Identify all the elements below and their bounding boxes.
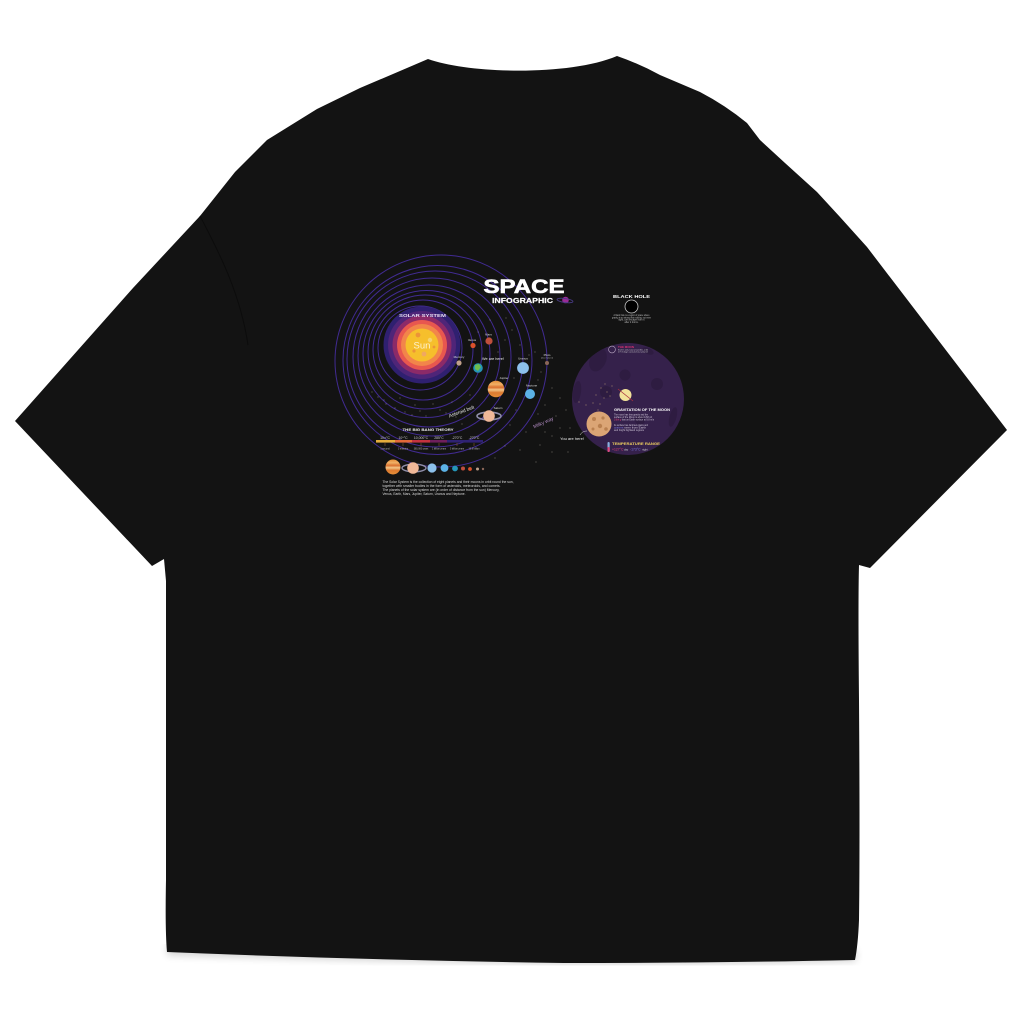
black hole text: light, can escape from it [618,319,645,322]
icon: purple ringed planet [557,297,573,304]
gravitation text [614,414,655,432]
black hole text: after it forms. [624,321,639,324]
stars [372,318,570,462]
panel: black hole [612,294,652,324]
gravitation text: 1/6th g that on Earth surface at 9.8 m/s [614,418,655,422]
temperature range: TEMPERATURE RANGE [612,442,661,446]
moon header text: THE MOON [618,345,634,349]
subtitle: INFOGRAPHIC [492,296,554,305]
moon header text: Earth's only natural satellite, orbit [618,348,648,352]
planets on orbits [454,332,553,422]
asteroid belt label: Asteroid belt [448,404,476,419]
black hole text [612,314,652,324]
mars: Mars [485,332,492,336]
pluto: Pluto [544,353,551,357]
venus: Venus [468,338,477,342]
mercury: Mercury [454,355,465,359]
black hole heading: BLACK HOLE [613,294,651,300]
gravitation heading: GRAVITATION OF THE MOON [614,408,670,412]
moon header text [618,345,649,354]
sun label: Sun [414,340,430,352]
temperature range: +127°C [612,448,624,452]
solar system description: The planets of the solar system are (in order of distance from the sun) Mercury, [382,488,500,492]
you are here label: You are here! [560,436,584,441]
earth [473,363,483,373]
big bang timeline: 285°C [434,436,444,440]
moon header text: 27.3 days around our planet [618,350,649,354]
black hole text: A black hole is a region of space where [614,314,650,317]
big bang timeline: -270°C [469,436,480,440]
solar system orbits [335,255,547,467]
big bang timeline: 10¹²°C [380,436,390,440]
icon: large planet [586,412,612,436]
temperature range: -173°C [630,448,641,452]
big bang timeline: 1 billion years [432,448,447,450]
title: SPACE [484,277,564,298]
big bang timeline: 3 minutes [398,448,409,450]
pluto [541,353,553,365]
milky way label: Milky way [532,416,555,430]
gravitation text: craters seen from Earth [614,426,647,430]
solar system description: together with smaller bodies in the form of asteroids, meteoroids, and comets. [382,484,501,488]
timeline heading: THE BIG BANG THEORY [402,428,454,432]
icon: small moon [618,389,633,401]
moon header icon [609,346,615,353]
big bang timeline: 13.8 billion [469,448,480,450]
jupiter: Jupiter [499,376,509,380]
solar system description: Venus, Earth, Mars, Jupiter, Saturn, Uranus and Neptune. [382,492,466,496]
we are here label: We are here! [482,357,504,361]
big bang timeline: -270°C [452,436,463,440]
big bang timeline: 1 second [380,448,390,450]
solar system description: The Solar System is the collection of eight planets and their moons in orbit round the sun, [382,480,514,484]
big bang timeline: 10⁹°C [398,436,408,440]
moon dust [579,384,612,410]
title [484,277,564,305]
planet lineup row [386,460,484,474]
big bang timeline: 5 billion years [450,448,465,450]
gravitation text: The moon has less gravity and the [614,414,649,416]
icon: black hole [625,300,638,313]
temperature range: night [642,448,648,452]
solar system description [382,480,514,496]
gravitation text: Its surface has dark lava plains and [614,424,649,427]
temperature range: day [624,448,629,452]
temperature range [608,442,661,452]
sun with halo rings [384,306,460,384]
big bang timeline: 10,000°C [414,436,429,440]
uranus: Uranus [518,356,528,360]
big bang timeline: 380,000 years [414,448,429,450]
pluto: (dwarf planet) [541,356,553,360]
gravitation text: surface of the Moon is about 1/6th of [614,416,652,419]
panel: moon [560,343,684,455]
big bang timeline [376,428,483,450]
gravitation text: and bright highland regions [614,429,645,432]
neptune: Neptune [526,384,538,388]
black hole text: gravity is so strong that nothing, not even [612,316,652,319]
saturn: Saturn [494,406,503,410]
solar system heading: SOLAR SYSTEM [399,313,446,318]
